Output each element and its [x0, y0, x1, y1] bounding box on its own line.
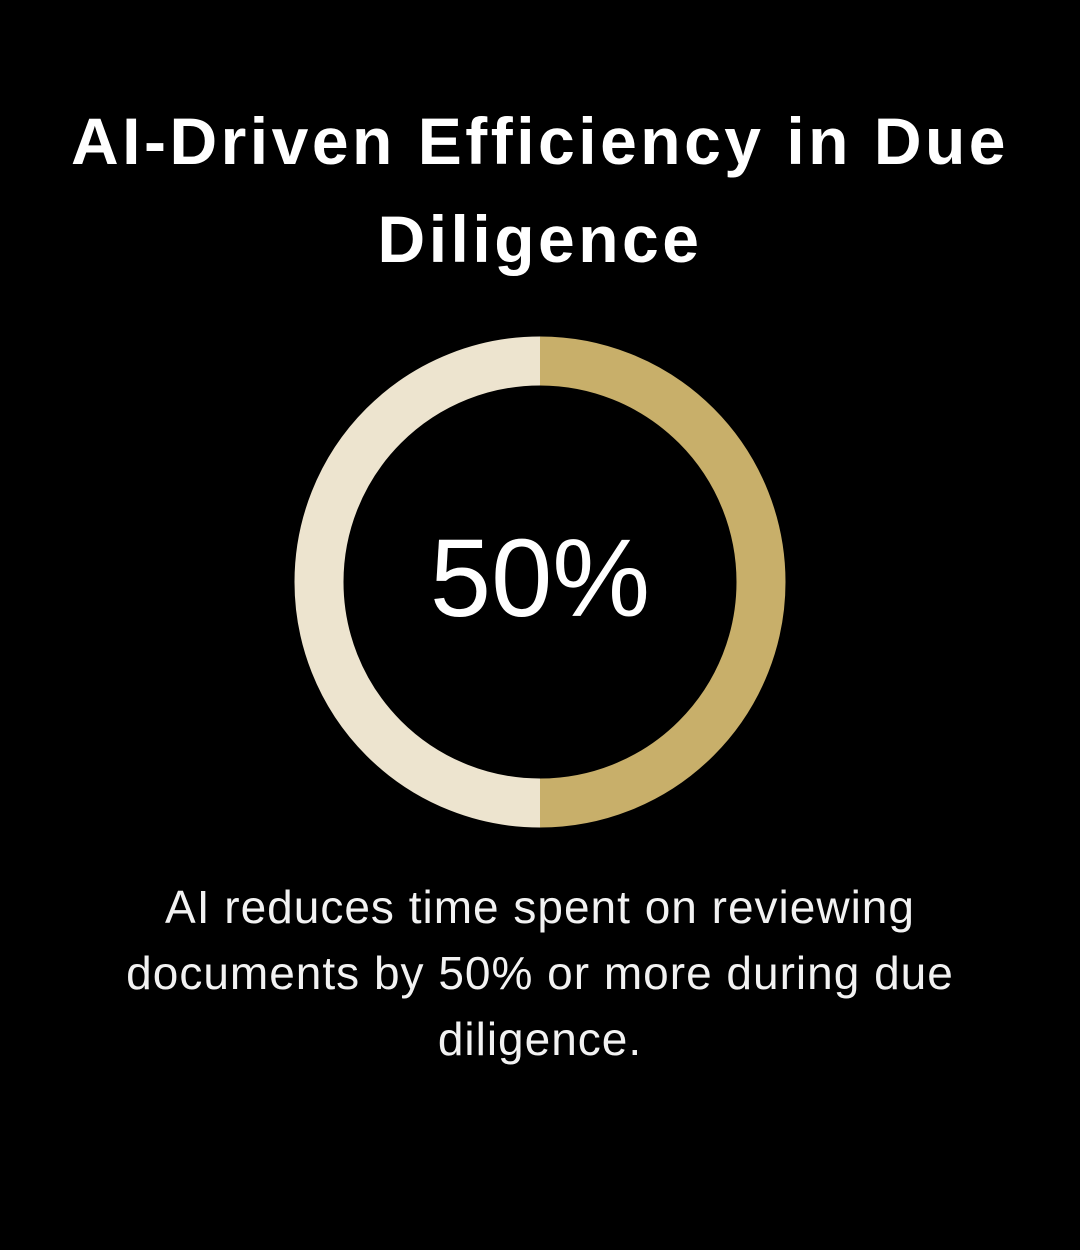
donut chart [294, 336, 786, 828]
ring: remaining half (light) [319, 361, 540, 803]
description text: documents by 50% or more during due [126, 947, 954, 999]
title: AI-Driven Efficiency in Due [71, 104, 1009, 178]
title: Diligence [378, 202, 702, 276]
description text: diligence. [438, 1013, 642, 1065]
title [71, 104, 1009, 276]
ring: 50% segment (gold) [540, 361, 761, 803]
description text: AI reduces time spent on reviewing [165, 881, 915, 933]
description text [126, 881, 954, 1065]
center value: 50% [430, 517, 650, 640]
